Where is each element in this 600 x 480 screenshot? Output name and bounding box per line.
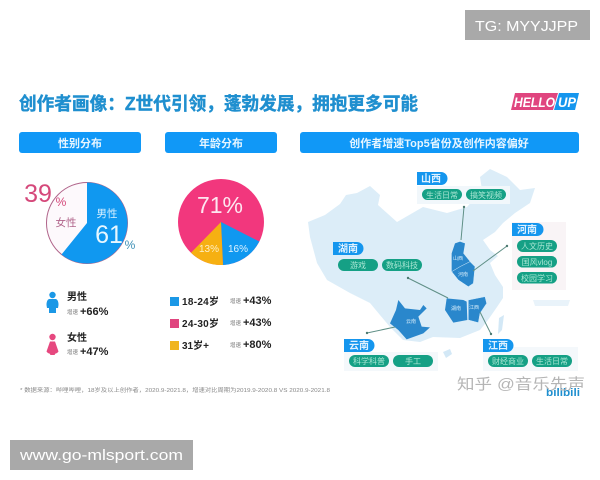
map of China: 云南 [406, 318, 416, 325]
icon: male figure [46, 292, 58, 313]
pie chart: gender: 女性 [56, 216, 76, 229]
watermark box: TG [465, 10, 590, 40]
pie chart: gender: % [125, 238, 136, 252]
legend: age 31+: 31岁+ [182, 339, 209, 352]
legend: male: +66% [80, 306, 109, 318]
legend: male: 增速 [67, 308, 79, 316]
province: Hunan [445, 298, 467, 323]
pie chart: gender [24, 180, 136, 264]
legend: age 24-30: +43% [243, 317, 272, 329]
heading: age distribution: 年龄分布 [199, 136, 243, 150]
icon: female figure [46, 334, 58, 355]
pie chart: age [178, 179, 264, 265]
legend: female: 女性 [67, 331, 87, 344]
legend: age 18-24: +43% [243, 295, 272, 307]
map of China: 河南 [458, 271, 468, 278]
heading: age distribution [165, 132, 277, 153]
callout: Henan [512, 222, 566, 290]
callout: Jiangxi [483, 339, 578, 371]
pie chart: gender: 39 [24, 180, 52, 208]
pie chart: gender: 男性 [96, 207, 118, 220]
logo: HELLO UP: UP [558, 95, 577, 110]
callout: Shanxi [417, 172, 510, 204]
map of China [308, 169, 570, 358]
legend: female: 增速 [67, 348, 79, 356]
map of China: 江西 [469, 304, 479, 311]
callout: Yunnan [344, 339, 438, 371]
legend: age 31+ [170, 339, 272, 352]
callout: Hunan [333, 242, 422, 271]
legend: age 24-30: 增速 [230, 319, 242, 327]
watermark: zhihu: 知乎 @音乐先声 [457, 375, 585, 393]
province: Henan [452, 262, 475, 287]
legend: age 18-24: 增速 [230, 297, 242, 305]
map islands [443, 315, 504, 358]
legend: male [46, 290, 109, 318]
callout: Jiangxi: 财经商业 [492, 356, 524, 366]
pie chart: age: 16% [228, 244, 248, 255]
province: Yunnan [390, 300, 430, 339]
legend: female [46, 331, 109, 358]
footnote: * 数据来源：哔哩哔哩，18岁及以上创作者，2020.9-2021.8，增速对比周期为2019.9-2020.8 VS 2020.9-2021.8 [20, 386, 330, 394]
callout: Jiangxi: 江西 [488, 339, 508, 352]
province: Shanxi [452, 242, 470, 272]
legend: age 31+: 增速 [230, 341, 242, 349]
pie chart: gender: % [56, 195, 67, 209]
watermark box: TG: TG: MYYJJPP [475, 18, 578, 35]
legend: male: 男性 [67, 290, 87, 303]
callout: Henan: 人文历史 [521, 241, 553, 251]
legend: age 24-30: 24-30岁 [182, 317, 219, 330]
callout: Hunan: 游戏 [350, 260, 366, 270]
watermark box: website [10, 440, 193, 470]
watermark box: website: www.go-mlsport.com [19, 447, 183, 464]
highlighted provinces [390, 242, 487, 339]
heading: top 5 provinces: 创作者增速Top5省份及创作内容偏好 [349, 136, 529, 150]
logo: bilibili: bilibili [546, 387, 580, 399]
legend: age 18-24: 18-24岁 [182, 295, 219, 308]
province: Jiangxi [468, 297, 487, 323]
pie chart: age: 13% [199, 244, 219, 255]
legend: age 24-30 [170, 317, 272, 330]
callout: Shanxi: 生活日常 [426, 190, 458, 200]
logo: HELLO UP [511, 93, 579, 110]
callout: Yunnan: 云南 [349, 339, 369, 352]
callout: Henan: 国风vlog [522, 258, 552, 267]
map outline [308, 169, 535, 342]
callout: Yunnan: 手工 [405, 356, 421, 366]
legend: age 18-24 [170, 295, 272, 308]
heading: gender distribution: 性别分布 [58, 136, 102, 150]
callout: Jiangxi: 生活日常 [536, 356, 568, 366]
leader lines [366, 206, 508, 335]
title: 创作者画像：Z世代引领，蓬勃发展，拥抱更多可能 [19, 93, 418, 114]
callout: Hunan: 湖南 [338, 242, 358, 255]
map of China: 山西 [453, 255, 463, 262]
callout: Shanxi: 山西 [421, 172, 441, 185]
callout: Henan: 河南 [517, 223, 537, 236]
callout: Hunan: 数码科技 [386, 260, 418, 270]
legend: age 31+: +80% [243, 339, 272, 351]
callout: Shanxi: 搞笑视频 [470, 190, 502, 200]
pie chart: age: 71% [197, 192, 243, 218]
logo: HELLO UP: HELLO [514, 95, 555, 110]
legend: female: +47% [80, 346, 109, 358]
heading: gender distribution [19, 132, 141, 153]
pie chart: gender: 61 [95, 221, 123, 249]
map of China: 湖南 [451, 305, 461, 312]
heading: top 5 provinces [300, 132, 579, 153]
callout: Yunnan: 科学科普 [353, 356, 385, 366]
callout: Henan: 校园学习 [521, 273, 553, 283]
